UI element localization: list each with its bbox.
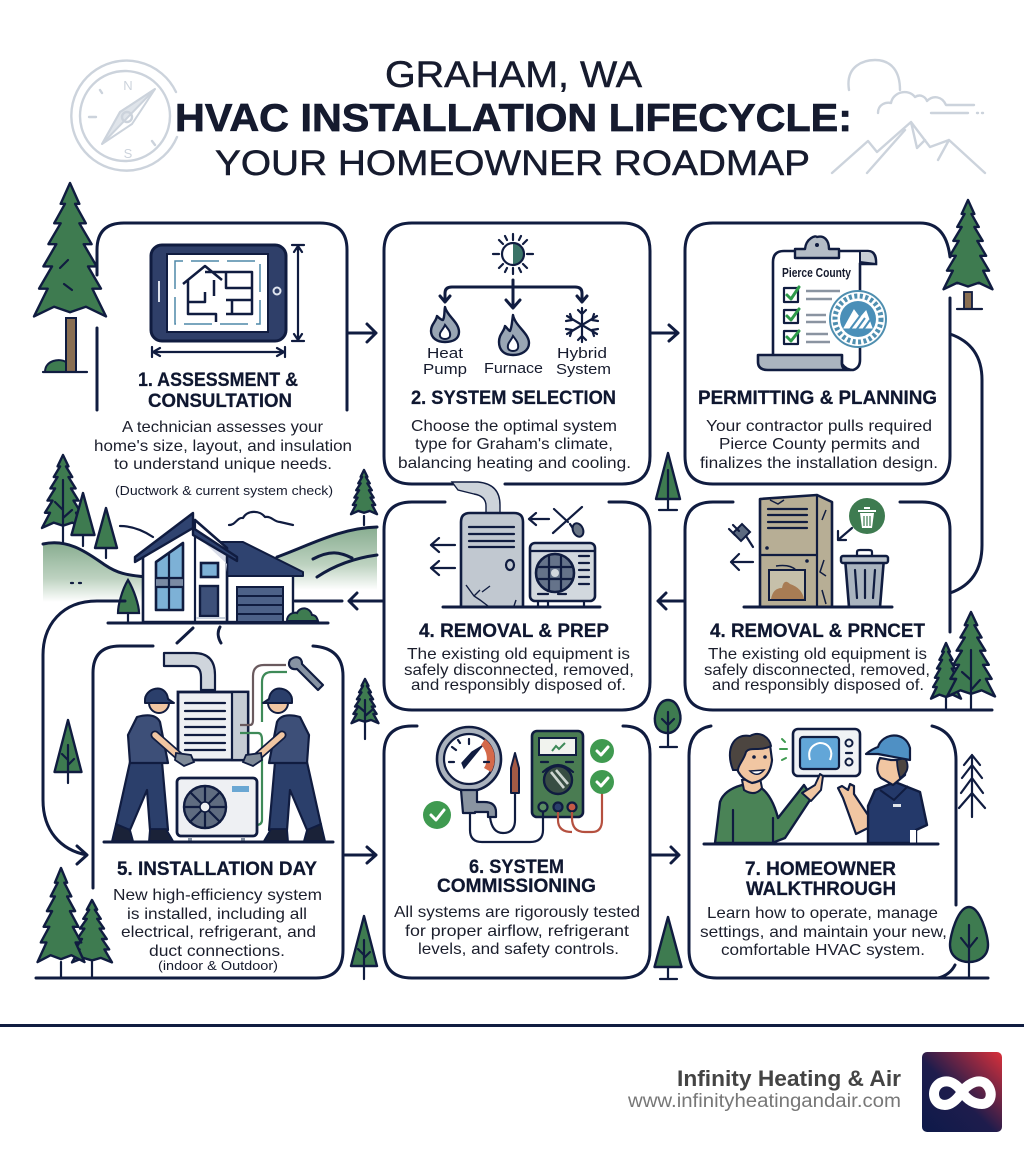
icon: removal arrows [431,513,549,575]
icon: old furnace [760,495,832,607]
icon: check badges [423,739,614,829]
icon: compass: S [124,146,133,161]
tree near house [118,580,139,622]
panel: 5 installation day [36,646,343,978]
cloud [229,512,293,525]
footer divider [0,1024,1024,1027]
arrow: step 4 to house to step 5 [43,593,383,864]
icon: old furnace [461,513,523,607]
tree right [351,470,377,525]
heading: 5. INSTALLATION DAY [117,858,317,880]
system labels: Heat [427,345,464,362]
icon: outdoor unit [177,778,257,841]
figure: technician left [112,689,194,841]
description: home's size, layout, and insulation [94,438,352,455]
panel: 4 removal and prep [384,482,650,710]
heading [437,856,596,897]
tree: round center [655,700,680,747]
tree: small center top [656,453,680,510]
arrow: step 6 to 7 [652,847,679,863]
heading: 6. SYSTEM [469,856,564,878]
system labels: Hybrid [557,345,607,362]
arrows: system branches [440,280,587,308]
title [175,53,852,183]
heading [745,858,896,900]
panel: 4 removal and prncet [685,495,992,710]
description [704,646,930,694]
description: type for Graham's climate, [415,436,613,453]
heading: 4. REMOVAL & PREP [419,620,609,642]
description: balancing heating and cooling. [398,455,631,472]
tree: pine top right [944,200,992,309]
icon: refrigerant lines [240,665,286,725]
logo: infinity mark [922,1052,1002,1132]
trees: pair bottom right of panel 4 [931,612,995,710]
tree: round bottom right [950,907,988,978]
ground [108,622,328,624]
description [404,646,634,694]
panel: 1 assessment and consultation [94,223,352,498]
figure: technician right [243,689,325,841]
arrow: step 4b to 4a [658,593,684,609]
heading [138,369,298,412]
icon: dimension arrows [152,245,304,357]
icon: wrench [289,657,323,690]
panel: 3 permitting and planning [685,223,950,484]
house body [135,513,237,622]
icon: unplugged cord [729,524,753,547]
description: and responsibly disposed of. [712,677,924,694]
description: A technician assesses your [122,419,323,436]
heading: PERMITTING & PLANNING [698,387,937,409]
icon: compass: N [123,78,133,93]
figure: technician in cap [838,735,927,843]
heading: 1. ASSESSMENT & [138,369,298,391]
description [394,904,640,958]
icon: tablet floor plan [151,245,286,341]
trees left [42,455,117,558]
icon: thermostat [780,729,860,776]
arrow: step 1 to 2 [348,324,376,342]
icon: duct [164,653,215,690]
heading: CONSULTATION [148,390,292,412]
system labels: System [556,361,611,378]
icon: recycle trash badge [838,498,885,540]
trees: between panel 5 and 6 [351,679,378,979]
description: is installed, including all [127,906,307,923]
description: finalizes the installation design. [700,455,938,472]
heading: 2. SYSTEM SELECTION [411,387,616,409]
panel: 7 homeowner walkthrough [689,726,988,978]
tree: tall pine left [34,183,106,372]
description [94,419,352,498]
description: to understand unique needs. [114,456,332,473]
system labels: Pump [423,361,467,378]
icon: duct [452,482,500,514]
ground line [104,840,333,844]
description: settings, and maintain your new, [700,924,947,941]
description: electrical, refrigerant, and [121,924,316,941]
icon: heat pump flame [431,307,459,342]
ground line [704,842,938,846]
heading: WALKTHROUGH [746,878,896,900]
description: The existing old equipment is [708,646,927,663]
icon: outdoor unit [530,543,595,606]
panel: 6 system commissioning [384,726,650,978]
description: Your contractor pulls required [706,418,932,435]
description: Choose the optimal system [411,418,617,435]
title: GRAHAM, WA [385,53,642,95]
title: HVAC INSTALLATION LIFECYCLE: [175,97,852,140]
description: Learn how to operate, manage [707,905,938,922]
arrow: step 5 to 6 [345,847,376,863]
description: The existing old equipment is [407,646,630,663]
bush [287,608,318,621]
tree: outline pine right [959,755,985,817]
description: (Ductwork & current system check) [115,483,333,498]
description: and responsibly disposed of. [411,677,626,694]
footer: company name and url [627,1066,901,1112]
connector: step 3 to step 4 [950,334,982,593]
description: duct connections. [149,943,285,960]
description: safely disconnected, removed, [704,662,930,679]
garage [217,542,303,622]
description [700,418,938,472]
icon: clipboard permit [758,236,886,370]
arrow: step 2 to 3 [652,325,678,341]
icon: probe and wires [470,753,602,842]
footer: company name and url: www.infinityheatingandair.com [627,1091,901,1112]
description: comfortable HVAC system. [721,942,925,959]
heading: 4. REMOVAL & PRNCET [710,620,925,642]
icon: indoor unit [178,692,248,760]
description [113,887,322,973]
description: safely disconnected, removed, [404,662,634,679]
icon: sun, cloud and mountains [832,60,985,173]
arrow: removal left [731,554,753,570]
system labels: Furnace [484,360,543,377]
panel: 2 system selection [384,223,650,484]
ground line [744,606,892,608]
description [398,418,631,472]
system labels [423,345,611,378]
icon: clipboard permit: Pierce County [782,265,852,280]
title: YOUR HOMEOWNER ROADMAP [215,144,810,183]
description [700,905,947,959]
icon: pressure gauge [437,727,501,817]
description: for proper airflow, refrigerant [405,923,630,940]
description: (indoor & Outdoor) [158,958,278,973]
description: All systems are rigorously tested [394,904,640,921]
heading: COMMISSIONING [437,875,596,897]
icon: multimeter [532,731,583,817]
icon: sun split [493,234,533,274]
heading: 7. HOMEOWNER [745,858,896,880]
icon: disconnected wire [553,507,582,533]
figure: homeowner [715,734,823,843]
description: levels, and safety controls. [418,941,619,958]
icon: compass [71,61,177,171]
ground line [443,606,600,608]
icon: snowflake [566,308,598,342]
trees: left column [38,720,112,978]
icon: trash can [841,550,888,607]
tree: small center bottom [654,917,682,979]
icon: furnace flame [499,315,529,355]
description: New high-efficiency system [113,887,322,904]
footer: company name and url: Infinity Heating & Air [677,1066,901,1091]
scene: house with hills [42,455,377,643]
description: Pierce County permits and [719,436,920,453]
